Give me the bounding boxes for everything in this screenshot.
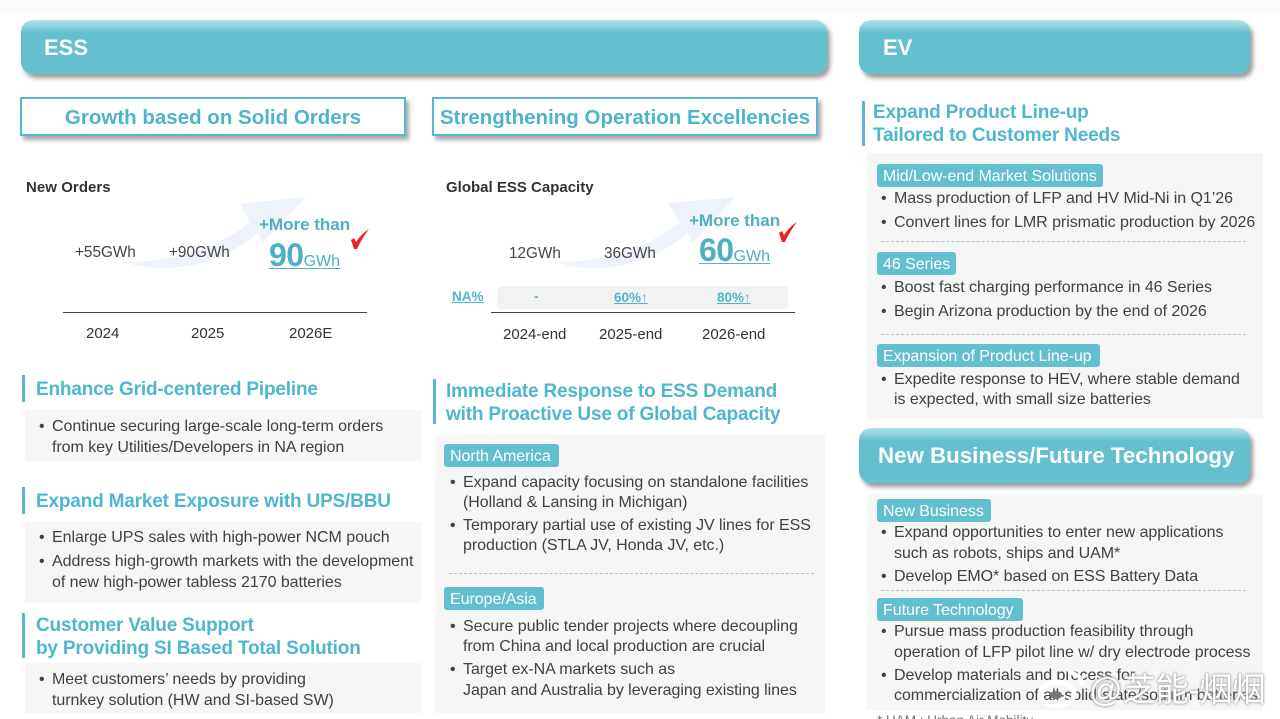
axis label: 2025: 2025 bbox=[191, 325, 224, 342]
text: Develop materials and process for bbox=[894, 667, 1135, 684]
text: production (STLA JV, Honda JV, etc.) bbox=[463, 537, 724, 554]
text: Secure public tender projects where decoupling bbox=[463, 618, 798, 635]
tag: Mid/Low-end Market Solutions: Mid/Low-end Market Solutions bbox=[883, 168, 1097, 185]
arrow: orders growth bbox=[126, 197, 306, 268]
tag: North America: North America bbox=[450, 448, 551, 465]
heading: Customer Value Support bbox=[36, 615, 254, 636]
tag: Future Technology: Future Technology bbox=[883, 602, 1014, 619]
heading: Tailored to Customer Needs bbox=[873, 125, 1120, 146]
text: • bbox=[881, 667, 887, 684]
heading: Strengthening Operation Excellencies: Strengthening Operation Excellencies bbox=[440, 106, 810, 129]
text: • bbox=[450, 661, 456, 678]
text block bbox=[39, 529, 414, 591]
value: 60 GWh: 60GWh bbox=[699, 232, 770, 268]
text: • bbox=[881, 371, 887, 388]
tag: 46 Series: 46 Series bbox=[883, 256, 950, 273]
axis label: 2025-end: 2025-end bbox=[599, 326, 662, 343]
text: operation of LFP pilot line w/ dry electrode process bbox=[894, 644, 1250, 661]
icon: red check mark bbox=[351, 229, 369, 249]
callout: more than: +More than bbox=[259, 215, 350, 234]
text block bbox=[39, 418, 383, 456]
text: from key Utilities/Developers in NA region bbox=[52, 439, 344, 456]
text: Temporary partial use of existing JV lines for ESS bbox=[463, 517, 811, 534]
text block: Expansion bbox=[881, 371, 1240, 408]
axis label: 2026E: 2026E bbox=[289, 325, 332, 342]
text: Develop EMO* based on ESS Battery Data bbox=[894, 568, 1198, 585]
panel: New Business/Future Technology header bbox=[859, 428, 1250, 483]
tag: North America bbox=[444, 444, 559, 467]
value: 2024 orders: +55GWh bbox=[75, 244, 136, 261]
text: • bbox=[881, 623, 887, 640]
text: of new high-power tabless 2170 batteries bbox=[52, 574, 342, 591]
tag: Europe/Asia: Europe/Asia bbox=[450, 591, 537, 608]
text block: New Business bbox=[881, 524, 1223, 585]
text: Address high-growth markets with the development bbox=[52, 553, 413, 570]
text: • bbox=[39, 418, 45, 435]
text: Expand capacity focusing on standalone facilities bbox=[463, 474, 808, 491]
text: Boost fast charging performance in 46 Series bbox=[894, 279, 1212, 296]
tag: New Business: New Business bbox=[883, 503, 984, 520]
text: Begin Arizona production by the end of 2026 bbox=[894, 303, 1207, 320]
text: from China and local production are crucial bbox=[463, 638, 765, 655]
text: Pursue mass production feasibility through bbox=[894, 623, 1193, 640]
value: NA share 2024: - bbox=[534, 289, 538, 304]
heading: by Providing SI Based Total Solution bbox=[36, 638, 361, 659]
tag: Europe/Asia bbox=[444, 587, 544, 610]
text: • bbox=[881, 568, 887, 585]
tag: 46 Series bbox=[877, 252, 956, 275]
panel: Enhance Grid-centered Pipeline bbox=[22, 375, 421, 461]
text: • bbox=[881, 214, 887, 231]
value: NA share 2026: 80%↑ bbox=[717, 290, 751, 305]
value: 90 GWh: 90GWh bbox=[269, 237, 340, 273]
heading bbox=[446, 381, 780, 425]
panel: ESS header: ESS bbox=[44, 35, 88, 60]
icon: red check mark bbox=[779, 222, 797, 242]
text: Target ex-NA markets such as bbox=[463, 661, 675, 678]
heading: Growth based on Solid Orders bbox=[20, 97, 406, 136]
watermark bbox=[1038, 671, 1266, 708]
text: such as robots, ships and UAM* bbox=[894, 545, 1120, 562]
text: (Holland & Lansing in Michigan) bbox=[463, 494, 687, 511]
text: • bbox=[881, 524, 887, 541]
heading: Expand Product Line-up bbox=[873, 102, 1089, 123]
panel: Customer Value Support bbox=[22, 613, 421, 713]
text: • bbox=[881, 190, 887, 207]
tag: Future Technology bbox=[877, 598, 1023, 621]
panel: Expand Market Exposure bbox=[22, 487, 421, 603]
heading: with Proactive Use of Global Capacity bbox=[446, 404, 780, 425]
text: • bbox=[450, 618, 456, 635]
panel: EV header bbox=[859, 20, 1250, 74]
heading: Expand Market Exposure with UPS/BBU bbox=[36, 491, 391, 512]
panel: EV header: EV bbox=[883, 35, 912, 60]
panel: Expand Product Line-up bbox=[862, 101, 1263, 419]
text: • bbox=[450, 517, 456, 534]
tag: Mid/Low-end Market Solutions bbox=[877, 164, 1103, 187]
text: • bbox=[39, 553, 45, 570]
text: Expand opportunities to enter new applications bbox=[894, 524, 1223, 541]
text: is expected, with small size batteries bbox=[894, 391, 1151, 408]
axis label: 2024: 2024 bbox=[86, 325, 119, 342]
text: Convert lines for LMR prismatic production by 2026 bbox=[894, 214, 1255, 231]
tag: New Business bbox=[877, 499, 991, 522]
heading bbox=[873, 102, 1120, 146]
value: 2025 orders: +90GWh bbox=[169, 244, 230, 261]
text block: Europe/Asia bbox=[450, 618, 798, 699]
chart title: Global ESS Capacity: Global ESS Capacity bbox=[446, 179, 594, 196]
panel: New Business and Future Technology bbox=[867, 494, 1263, 710]
value: NA share 2025: 60%↑ bbox=[614, 290, 648, 305]
panel: Immediate Response to ESS Demand bbox=[433, 379, 825, 713]
tag: Expansion of Product Line-up: Expansion of Product Line-up bbox=[883, 348, 1092, 365]
watermark text: @芝能-烟烟 bbox=[1089, 671, 1266, 708]
chart title: New Orders: New Orders bbox=[26, 179, 111, 196]
label: NA%: NA% bbox=[452, 289, 484, 304]
value: 2024-end capacity: 12GWh bbox=[509, 245, 561, 262]
chart: Global ESS Capacity bbox=[446, 179, 797, 343]
arrow: capacity growth bbox=[558, 197, 736, 268]
text block: North America bbox=[450, 474, 811, 554]
axis label: 2026-end: 2026-end bbox=[702, 326, 765, 343]
text block bbox=[39, 671, 334, 709]
text: • bbox=[39, 671, 45, 688]
panel: New Business/Future Technology header: New Business/Future Technology bbox=[878, 443, 1234, 468]
text: • bbox=[881, 279, 887, 296]
tag: Expansion of Product Line-up bbox=[877, 344, 1100, 367]
chart: New Orders bbox=[26, 179, 369, 342]
text: • bbox=[450, 474, 456, 491]
text block: Mid/Low-end bbox=[881, 190, 1255, 231]
text: Enlarge UPS sales with high-power NCM pouch bbox=[52, 529, 390, 546]
text: Meet customers’ needs by providing bbox=[52, 671, 306, 688]
text: turnkey solution (HW and SI-based SW) bbox=[52, 692, 334, 709]
axis label: 2024-end: 2024-end bbox=[503, 326, 566, 343]
text: • bbox=[881, 303, 887, 320]
heading bbox=[36, 615, 361, 659]
text block: Future Technology bbox=[881, 623, 1258, 704]
text: commercialization of all-solid-state/sodium batteries bbox=[894, 687, 1258, 704]
heading: Growth based on Solid Orders: Growth based on Solid Orders bbox=[65, 106, 361, 129]
callout: more than: +More than bbox=[689, 211, 780, 230]
value: 2025-end capacity: 36GWh bbox=[604, 245, 656, 262]
text block: 46 Series bbox=[881, 279, 1212, 320]
heading: Immediate Response to ESS Demand bbox=[446, 381, 777, 402]
text: Japan and Australia by leveraging existing lines bbox=[463, 682, 797, 699]
heading: Strengthening Operation Excellencies bbox=[432, 97, 818, 136]
panel: ESS header bbox=[21, 20, 827, 74]
text: Expedite response to HEV, where stable demand bbox=[894, 371, 1240, 388]
text: • bbox=[39, 529, 45, 546]
text: Continue securing large-scale long-term orders bbox=[52, 418, 383, 435]
heading: Enhance Grid-centered Pipeline bbox=[36, 379, 318, 400]
icon: weibo logo bbox=[1038, 671, 1084, 708]
text: Mass production of LFP and HV Mid-Ni in Q1’26 bbox=[894, 190, 1233, 207]
